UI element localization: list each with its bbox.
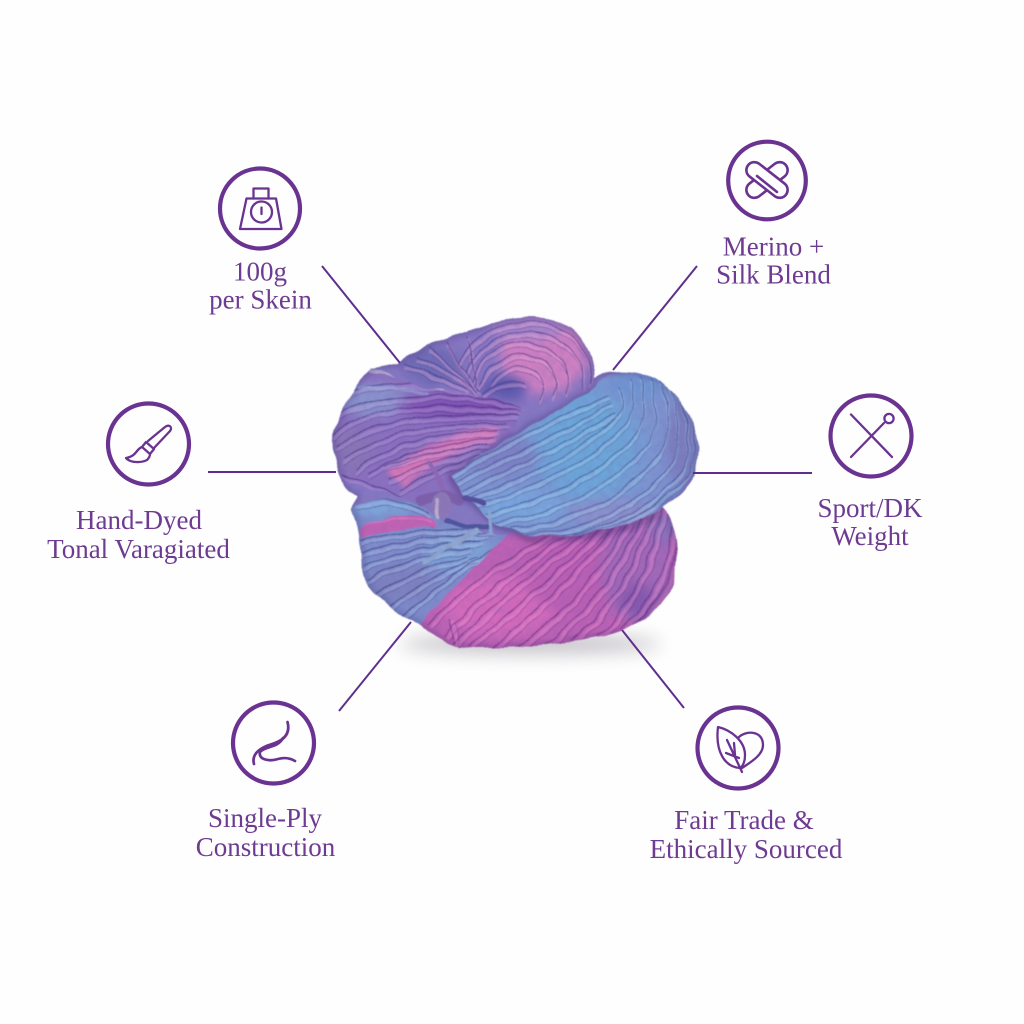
label: Fair Trade & Ethically Sourced: Fair Trade & (674, 805, 814, 835)
label: Hand-Dyed Tonal Varagiated: Hand-Dyed (76, 505, 202, 535)
icon: paint brush (126, 426, 171, 462)
label: Merino + Silk Blend: Merino + (723, 232, 824, 262)
connector line: 100g (322, 266, 400, 363)
feature: merino silk blend (716, 142, 831, 290)
connector line: hand-dyed (208, 471, 336, 473)
label: Single-Ply Construction: Construction (196, 832, 336, 862)
label: 100g per Skein: 100g (233, 256, 287, 286)
label: Sport/DK Weight: Sport/DK (817, 493, 923, 523)
label: Hand-Dyed Tonal Varagiated: Tonal Varagiated (47, 534, 230, 564)
icon: leaf and heart (717, 727, 763, 772)
icon: scale weight (240, 188, 282, 229)
feature: hand-dyed (47, 404, 230, 564)
connector line: single-ply (339, 622, 411, 711)
label: Sport/DK Weight: Weight (831, 521, 909, 551)
label: Fair Trade & Ethically Sourced: Ethically Sourced (650, 834, 843, 864)
label: Single-Ply Construction: Single-Ply (208, 803, 322, 833)
feature: single-ply (196, 702, 336, 862)
connector line: merino (613, 266, 697, 370)
label: 100g per Skein: per Skein (209, 284, 312, 314)
icon: yarn strand (253, 722, 295, 764)
knot (430, 463, 445, 492)
feature: sport/DK weight (817, 396, 923, 551)
hand-dyed yarn skein (331, 315, 700, 650)
feature: 100g per skein (209, 168, 312, 314)
connector line: sport weight (693, 472, 812, 474)
yarn shadow (400, 634, 660, 654)
label: Merino + Silk Blend: Silk Blend (716, 260, 831, 290)
feature: fair trade (650, 708, 843, 864)
icon: knitting needles (851, 414, 894, 457)
icon: interlocked fibres (743, 159, 791, 201)
connector line: fair trade (622, 630, 684, 708)
shadow cast by upper coil (452, 478, 657, 538)
